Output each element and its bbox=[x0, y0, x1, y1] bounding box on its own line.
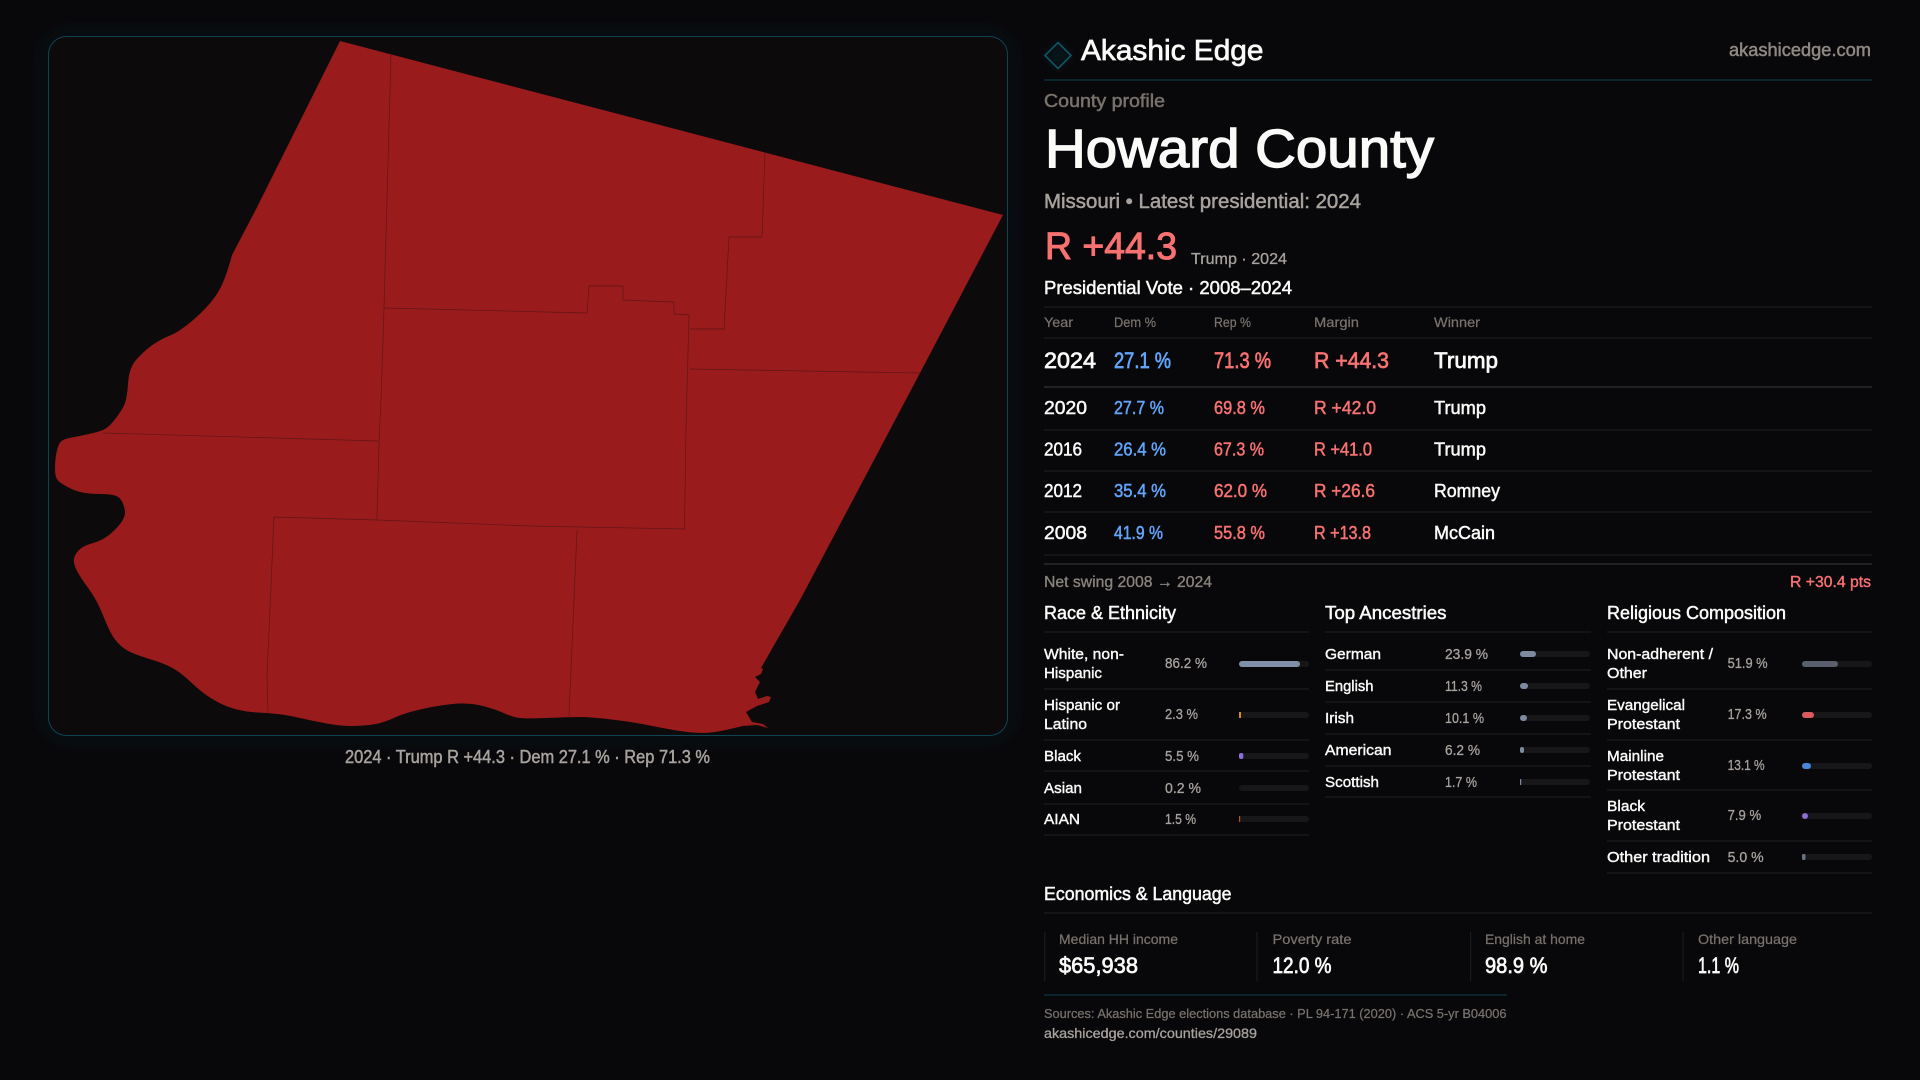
row: non-adherent: 51.9 % bbox=[1728, 655, 1768, 672]
row: aian: 1.5 % bbox=[1165, 811, 1196, 828]
row: mainline: 13.1 % bbox=[1728, 757, 1765, 774]
stat: poverty: Poverty rate bbox=[1272, 931, 1352, 947]
row 2008: 2008 bbox=[1044, 523, 1087, 543]
row 2012: 35.4 % bbox=[1114, 481, 1166, 501]
row 2012: R +26.6 bbox=[1314, 481, 1375, 501]
row: hispanic: Hispanic or bbox=[1044, 697, 1120, 714]
row: white: Hispanic bbox=[1044, 665, 1102, 682]
row 2020: Trump bbox=[1434, 398, 1486, 418]
row: black: 5.5 % bbox=[1165, 748, 1199, 765]
row 2020: 69.8 % bbox=[1214, 398, 1265, 418]
site url: akashicedge.com bbox=[1729, 40, 1871, 60]
row 2012: Romney bbox=[1434, 481, 1500, 501]
row: english: 11.3 % bbox=[1445, 678, 1482, 695]
row: aian: AIAN bbox=[1044, 811, 1080, 828]
row 2020 bbox=[1044, 398, 1486, 418]
panel: economics and language bbox=[1044, 884, 1872, 981]
stat: poverty: 12.0 % bbox=[1272, 953, 1332, 978]
map caption: 2024 · Trump R +44.3 · Dem 27.1 % · Rep 71.3 % bbox=[345, 747, 710, 767]
county title block bbox=[1044, 91, 1434, 268]
row: hispanic bbox=[1044, 697, 1309, 733]
stat: poverty bbox=[1257, 931, 1352, 981]
row 2016: R +41.0 bbox=[1314, 440, 1372, 460]
headline margin: R +44.3 bbox=[1045, 226, 1177, 268]
panel: race and ethnicity bbox=[1044, 603, 1309, 835]
row: black bbox=[1044, 748, 1309, 765]
stat: other language: Other language bbox=[1698, 931, 1797, 947]
row 2016: 26.4 % bbox=[1114, 440, 1166, 460]
row 2008: 41.9 % bbox=[1114, 523, 1163, 543]
row: hispanic: 2.3 % bbox=[1165, 706, 1198, 723]
row 2020: 27.7 % bbox=[1114, 398, 1164, 418]
table header: Dem % bbox=[1114, 314, 1156, 330]
subtitle: Missouri • Latest presidential: 2024 bbox=[1044, 191, 1361, 213]
row: white bbox=[1044, 646, 1309, 682]
row 2008: 55.8 % bbox=[1214, 523, 1265, 543]
header: brand bar bbox=[1044, 35, 1872, 80]
row 2024: Trump bbox=[1434, 348, 1498, 373]
row: black protestant: Protestant bbox=[1607, 817, 1681, 834]
row: american bbox=[1325, 742, 1590, 759]
row: irish: Irish bbox=[1325, 710, 1354, 727]
icon: diamond logo bbox=[1045, 42, 1071, 68]
row: german bbox=[1325, 646, 1590, 663]
row: hispanic: Latino bbox=[1044, 716, 1087, 733]
stat: income: Median HH income bbox=[1059, 931, 1178, 947]
title: Howard County bbox=[1045, 119, 1434, 179]
stat: english at home bbox=[1471, 931, 1585, 981]
row: black: Black bbox=[1044, 748, 1081, 765]
row: aian bbox=[1044, 811, 1309, 828]
row: irish: 10.1 % bbox=[1445, 710, 1484, 727]
row: evangelical: Protestant bbox=[1607, 716, 1681, 733]
row: german: German bbox=[1325, 646, 1381, 663]
row: mainline: Protestant bbox=[1607, 767, 1681, 784]
footer: county url: akashicedge.com/counties/29089 bbox=[1044, 1025, 1257, 1041]
heading: Religious Composition bbox=[1607, 603, 1786, 623]
brand name: Akashic Edge bbox=[1081, 35, 1264, 67]
row: mainline bbox=[1607, 748, 1872, 784]
row 2008: R +13.8 bbox=[1314, 523, 1371, 543]
row: evangelical: 17.3 % bbox=[1728, 706, 1767, 723]
row: mainline: Mainline bbox=[1607, 748, 1664, 765]
headline note: Trump · 2024 bbox=[1191, 251, 1287, 268]
row 2016: 2016 bbox=[1044, 440, 1082, 460]
stat: income: $65,938 bbox=[1059, 953, 1138, 978]
footer: sources: Sources: Akashic Edge elections database · PL 94-171 (2020) · ACS 5-yr B04006 bbox=[1044, 1006, 1506, 1021]
row: asian: Asian bbox=[1044, 780, 1082, 797]
row: asian bbox=[1044, 780, 1309, 797]
row: irish bbox=[1325, 710, 1590, 727]
row 2016: Trump bbox=[1434, 440, 1486, 460]
table: presidential results bbox=[1044, 307, 1872, 555]
row: white: White, non- bbox=[1044, 646, 1124, 663]
row 2020: 2020 bbox=[1044, 398, 1087, 418]
row 2024 bbox=[1044, 348, 1498, 373]
stat: english at home: English at home bbox=[1485, 931, 1585, 947]
row 2008: McCain bbox=[1434, 523, 1495, 543]
row: black protestant: Black bbox=[1607, 798, 1646, 815]
row: other tradition bbox=[1607, 849, 1872, 866]
table header: Margin bbox=[1314, 314, 1359, 330]
panel: religious composition bbox=[1607, 603, 1872, 873]
row 2012: 2012 bbox=[1044, 481, 1082, 501]
row: scottish bbox=[1325, 774, 1590, 791]
heading: Economics & Language bbox=[1044, 884, 1232, 904]
row: scottish: 1.7 % bbox=[1445, 774, 1477, 791]
stat: english at home: 98.9 % bbox=[1485, 953, 1548, 978]
row: english bbox=[1325, 678, 1590, 695]
row: evangelical: Evangelical bbox=[1607, 697, 1685, 714]
panel: county map bbox=[48, 36, 1008, 736]
row: scottish: Scottish bbox=[1325, 774, 1379, 791]
row: white: 86.2 % bbox=[1165, 655, 1207, 672]
row: black protestant: 7.9 % bbox=[1728, 807, 1761, 824]
row: american: 6.2 % bbox=[1445, 742, 1480, 759]
row: black protestant bbox=[1607, 798, 1872, 834]
stat: other language: 1.1 % bbox=[1698, 953, 1739, 978]
heading: Top Ancestries bbox=[1325, 603, 1446, 623]
net swing label: Net swing 2008 → 2024 bbox=[1044, 574, 1212, 591]
row 2012 bbox=[1044, 481, 1500, 501]
row: evangelical bbox=[1607, 697, 1872, 733]
row 2012: 62.0 % bbox=[1214, 481, 1267, 501]
net swing value: R +30.4 pts bbox=[1790, 574, 1871, 591]
heading: presidential vote: Presidential Vote · 2008–2024 bbox=[1044, 278, 1292, 298]
row 2008 bbox=[1044, 523, 1495, 543]
row: english: English bbox=[1325, 678, 1374, 695]
row: american: American bbox=[1325, 742, 1392, 759]
stat: other language bbox=[1683, 931, 1797, 981]
table header: Rep % bbox=[1214, 314, 1251, 330]
row 2024: R +44.3 bbox=[1314, 348, 1389, 373]
stat: income bbox=[1045, 931, 1178, 981]
row: non-adherent bbox=[1607, 646, 1872, 682]
row 2024: 71.3 % bbox=[1214, 348, 1271, 373]
table header: Year bbox=[1044, 314, 1073, 330]
row: other tradition: Other tradition bbox=[1607, 849, 1710, 866]
heading: Race & Ethnicity bbox=[1044, 603, 1176, 623]
row 2024: 2024 bbox=[1044, 348, 1096, 373]
row 2016: 67.3 % bbox=[1214, 440, 1264, 460]
row: german: 23.9 % bbox=[1445, 646, 1488, 663]
eyebrow: County profile bbox=[1044, 91, 1165, 111]
row 2024: 27.1 % bbox=[1114, 348, 1171, 373]
table header: Winner bbox=[1434, 314, 1480, 330]
row: other tradition: 5.0 % bbox=[1728, 849, 1764, 866]
panel: top ancestries bbox=[1325, 603, 1591, 797]
map: Howard County township shape bbox=[55, 41, 1003, 733]
row 2020: R +42.0 bbox=[1314, 398, 1376, 418]
table header bbox=[1044, 314, 1480, 330]
row: non-adherent: Non-adherent / bbox=[1607, 646, 1714, 663]
row: non-adherent: Other bbox=[1607, 665, 1647, 682]
row: asian: 0.2 % bbox=[1165, 780, 1201, 797]
row 2016 bbox=[1044, 440, 1486, 460]
